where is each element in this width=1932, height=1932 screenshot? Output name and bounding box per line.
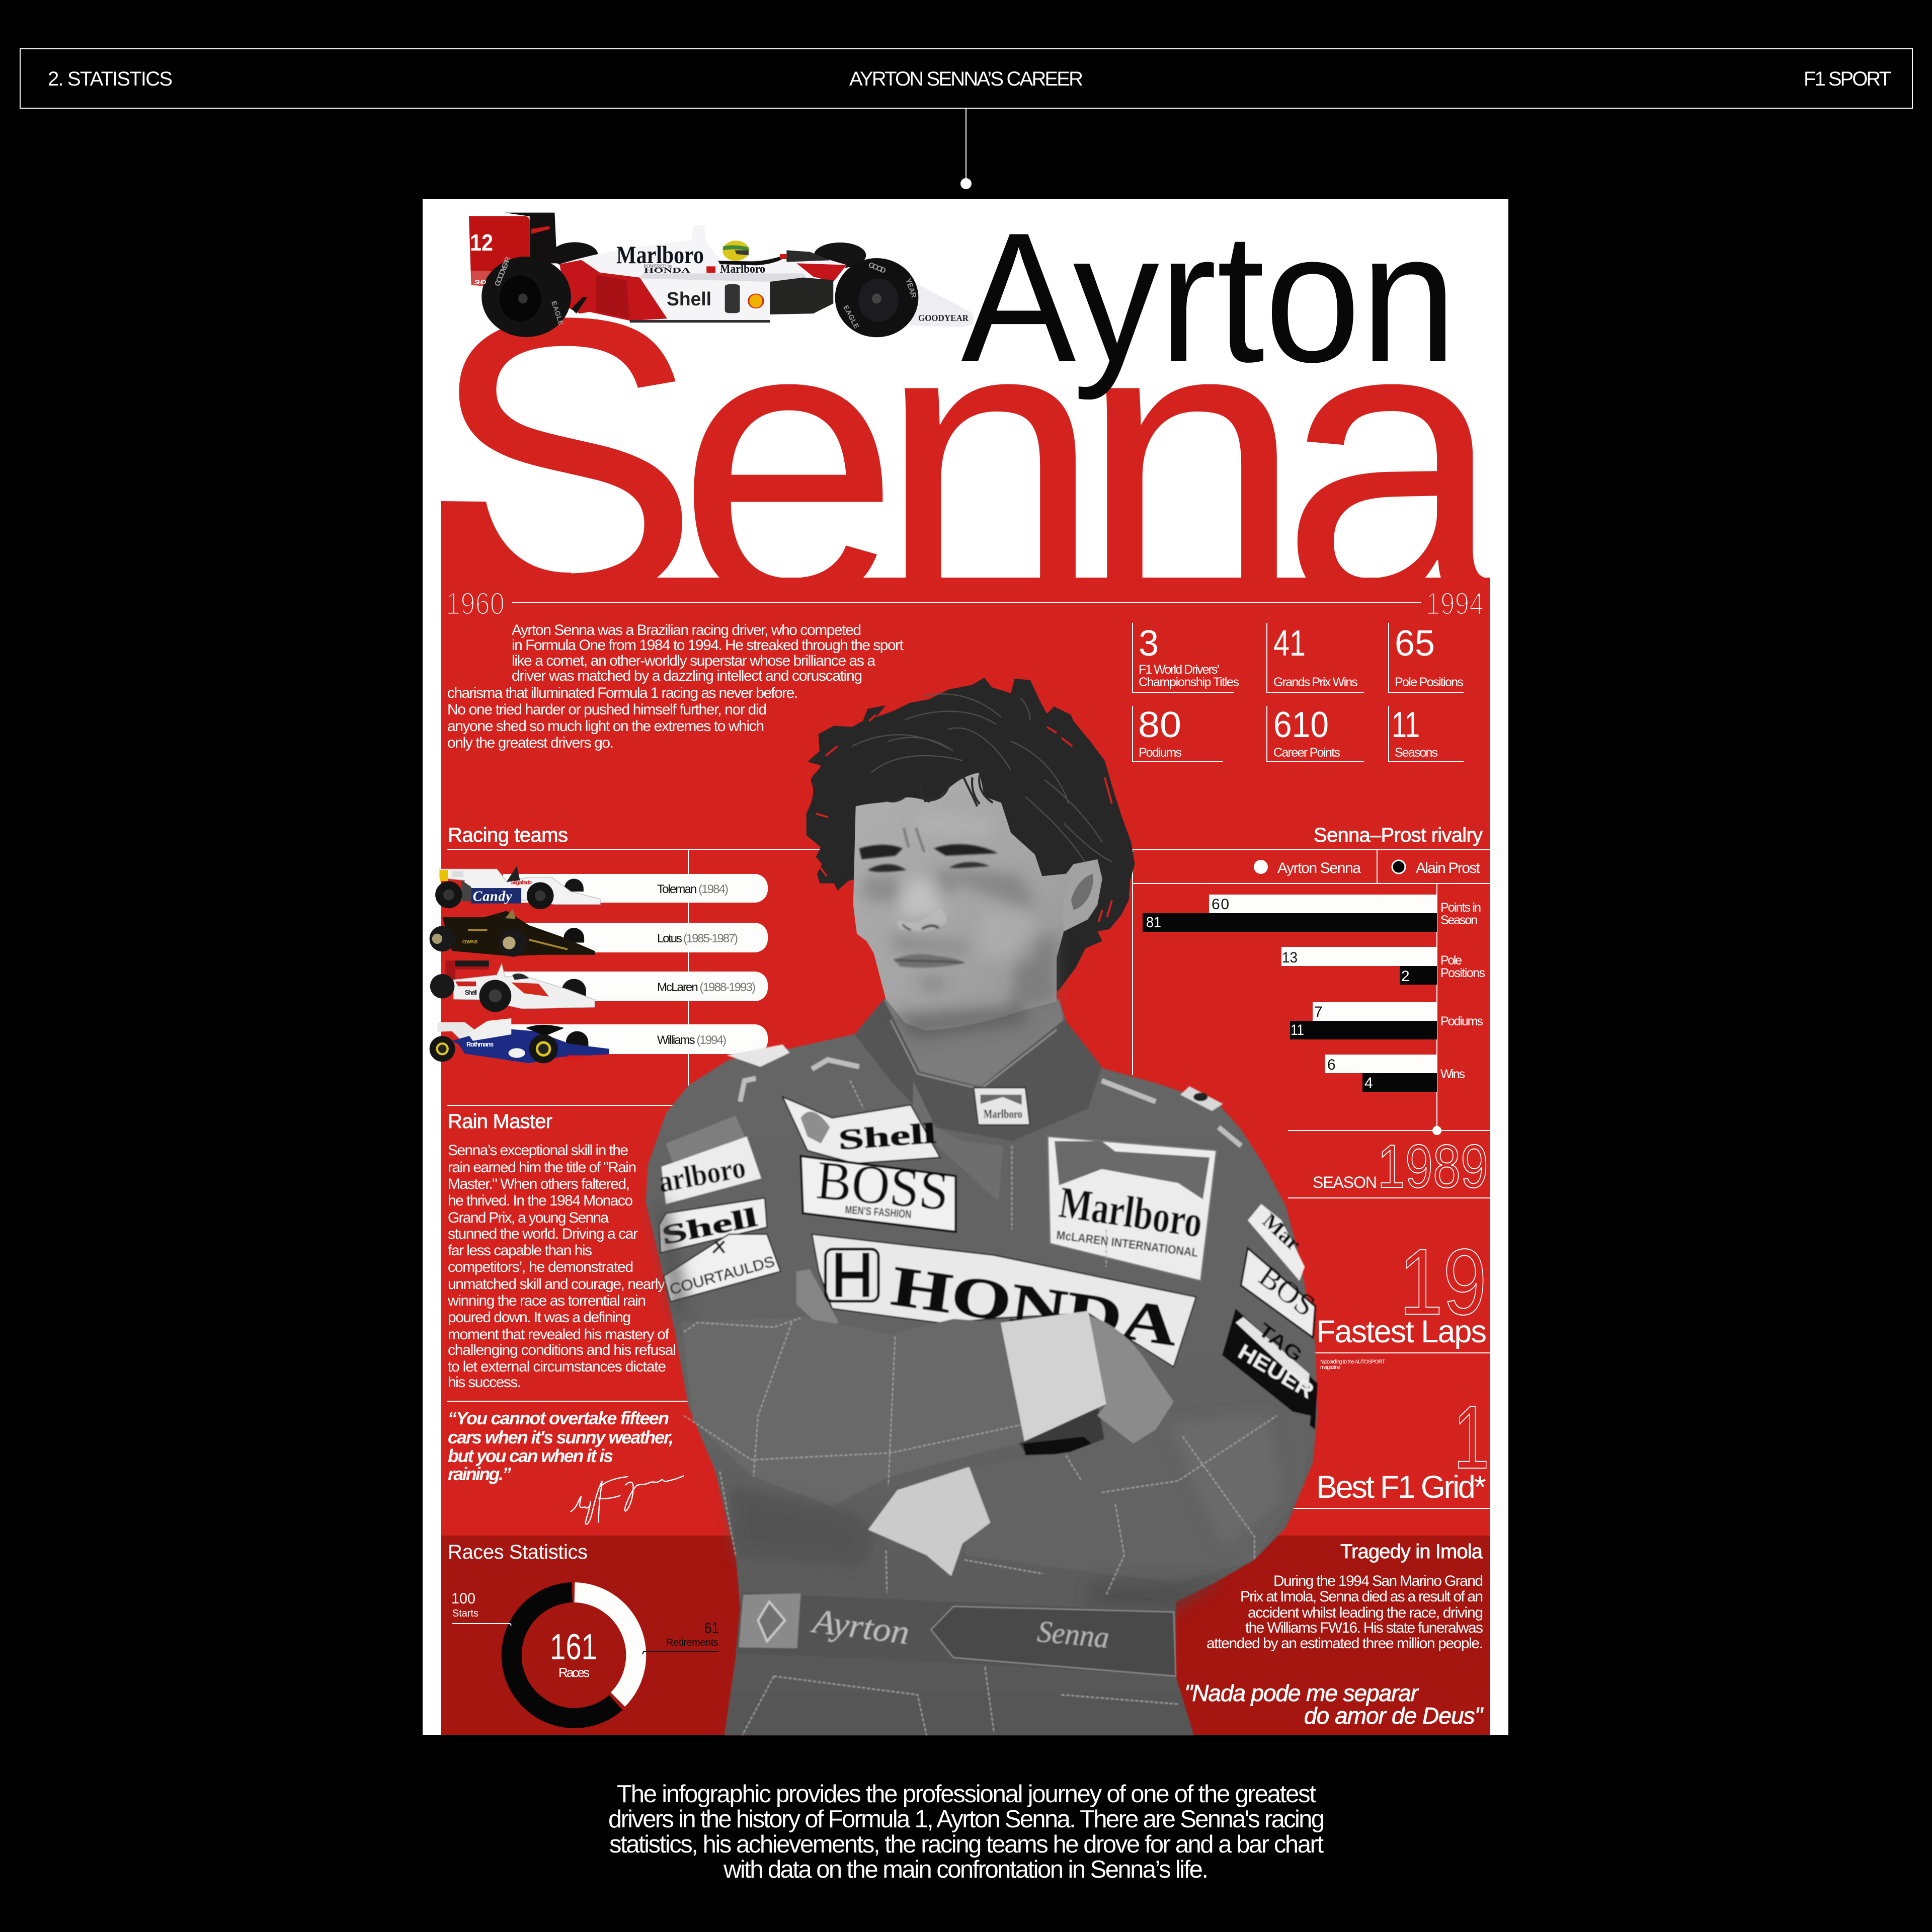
car sponsor text: GOOD xyxy=(867,261,887,275)
car sponsor text: EAGLE xyxy=(550,300,566,326)
portuguese quote: do amor de Deus" xyxy=(1304,1703,1484,1729)
chest patch: BOSS: MEN'S FASHION xyxy=(845,1203,912,1221)
bars: points: 60 xyxy=(1212,896,1229,913)
bars: wins: 6 xyxy=(1327,1057,1336,1073)
chest patch: Marlboro: Marlboro xyxy=(1057,1177,1205,1247)
rivalry heading: Senna–Prost rivalry xyxy=(1314,824,1483,846)
stat: titles: 3 xyxy=(1139,623,1159,664)
car sponsor text: GOODYEAR xyxy=(918,313,969,323)
car sponsor text: POWERED by xyxy=(644,264,672,269)
rain master body text: unmatched skill and courage, nearly xyxy=(448,1276,665,1293)
car: Williams: Rothmans xyxy=(466,1040,494,1048)
tragedy body: the Williams FW16. His state funeralwas xyxy=(1245,1620,1483,1636)
bar category labels: Season xyxy=(1440,913,1478,927)
bar category labels: Wins xyxy=(1440,1067,1465,1081)
footer description: drivers in the history of Formula 1, Ayrton Senna. There are Senna's racing xyxy=(608,1806,1325,1833)
pill: Williams: Williams (1994) xyxy=(657,1033,727,1047)
donut chart xyxy=(512,1592,636,1718)
legend: Ayrton Senna xyxy=(1277,860,1361,876)
stat: seasons xyxy=(1389,705,1464,762)
fastest laps: Fastest Laps xyxy=(1316,1314,1487,1349)
sleeve patch: right Marlboro xyxy=(1248,1204,1305,1281)
white cuff lower xyxy=(868,1467,990,1576)
sleeve patch: right Marlboro: Mar xyxy=(1258,1209,1305,1256)
rain master body text: competitors’, he demonstrated xyxy=(448,1259,633,1275)
retirements label xyxy=(642,1620,719,1654)
bars: podiums: 11 xyxy=(1291,1022,1304,1038)
fastest laps xyxy=(1313,1230,1490,1371)
intro text: only the greatest drivers go. xyxy=(447,735,614,751)
car: Williams xyxy=(430,1018,609,1063)
intro text: Ayrton Senna was a Brazilian racing driver, who competed xyxy=(512,622,861,638)
rain master body text: Master." When others faltered, xyxy=(448,1176,630,1192)
best grid: 1 xyxy=(1454,1387,1489,1487)
car sponsor text xyxy=(470,229,969,330)
car: Lotus xyxy=(430,909,595,957)
shoulder patches xyxy=(727,1044,789,1067)
rain master body text: far less capable than his xyxy=(448,1242,592,1259)
bar category labels: Points in xyxy=(1440,901,1481,915)
red main panel xyxy=(441,501,1490,1735)
donut centre: Races xyxy=(558,1665,590,1680)
bar category labels: Positions xyxy=(1440,966,1485,980)
footnote: magazine xyxy=(1320,1364,1340,1371)
footer description: statistics, his achievements, the racing teams he drove for and a bar chart xyxy=(609,1831,1324,1858)
chest patch: Honda: HONDA xyxy=(888,1254,1181,1357)
starts label xyxy=(451,1590,511,1626)
signature xyxy=(571,1476,684,1524)
neck xyxy=(884,999,1064,1086)
timeline: 1994 xyxy=(1426,587,1484,621)
footer description xyxy=(608,1781,1325,1883)
rain quote: cars when it's sunny weather, xyxy=(448,1427,674,1447)
intro text: charisma that illuminated Formula 1 racing as never before. xyxy=(447,685,798,701)
tragedy body xyxy=(1206,1573,1483,1652)
sleeve patch: Marlboro xyxy=(656,1115,761,1204)
rain master body text xyxy=(447,1142,676,1391)
chest patch: Shell: Shell xyxy=(837,1117,937,1156)
rain quote: raining.” xyxy=(448,1464,511,1484)
car: McLaren: Shell xyxy=(465,989,477,996)
upper forearm xyxy=(682,1317,1025,1506)
rain master body text: his success. xyxy=(448,1374,521,1391)
season 1989: SEASON xyxy=(1313,1173,1377,1191)
collar xyxy=(855,999,1102,1141)
lower hand fingers xyxy=(796,1269,839,1327)
career stats grid xyxy=(1133,623,1464,762)
nose xyxy=(897,909,947,931)
stat: points xyxy=(1267,705,1364,762)
bars: points xyxy=(1143,895,1437,932)
hair highlights xyxy=(852,694,1112,866)
stat: titles: F1 World Drivers’ xyxy=(1139,663,1220,677)
racing teams heading: Racing teams xyxy=(448,824,568,846)
pill: McLaren: McLaren (1988-1993) xyxy=(657,981,756,994)
sleeve patch: Shell xyxy=(659,1198,767,1253)
car sponsor text: Shell xyxy=(667,289,711,310)
tragedy body: During the 1994 San Marino Grand xyxy=(1273,1573,1483,1589)
intro text: anyone shed so much light on the extremes to which xyxy=(447,718,764,735)
pill: Lotus: Lotus (1985-1987) xyxy=(657,932,738,945)
shadow under arms xyxy=(1007,1402,1106,1453)
stat: poles: Pole Positions xyxy=(1395,675,1464,689)
intro text: No one tried harder or pushed himself further, nor did xyxy=(447,701,767,718)
pill: Lotus xyxy=(503,923,768,952)
bars: poles: 13 xyxy=(1282,949,1298,966)
stat: points: Career Points xyxy=(1273,746,1340,760)
team cars xyxy=(430,866,609,1063)
stat: titles: Championship Titles xyxy=(1139,675,1239,689)
chest patch: Marlboro xyxy=(1048,1137,1217,1281)
season 1989 xyxy=(1288,1132,1490,1200)
rain master block xyxy=(447,1110,689,1524)
eyebrows xyxy=(859,844,998,859)
hand xyxy=(1088,1316,1174,1443)
legend xyxy=(1254,860,1481,876)
hair xyxy=(807,678,1135,992)
suit soft shading xyxy=(653,1201,1281,1611)
sleeve patch: TAG Heuer: HEUER xyxy=(1234,1339,1318,1403)
stat: wins: 41 xyxy=(1273,623,1306,664)
stat: podiums: 80 xyxy=(1138,705,1181,745)
lower forearm xyxy=(962,1406,1311,1583)
tragedy body: Prix at Imola, Senna died as a result of an xyxy=(1240,1588,1483,1605)
intro text: in Formula One from 1984 to 1994. He streaked through the sport xyxy=(512,637,904,654)
chest patch: Honda xyxy=(812,1234,1196,1367)
white cuff upper xyxy=(1001,1311,1106,1441)
car sponsor text: 12 xyxy=(470,229,493,256)
portrait: suit: Ayrton xyxy=(809,1601,912,1652)
rivalry section xyxy=(1133,824,1490,1135)
starts label: Starts xyxy=(452,1608,478,1619)
bars: podiums: 7 xyxy=(1314,1004,1323,1020)
intro text: like a comet, an other-worldly superstar whose brilliance as a xyxy=(512,653,875,669)
fringe strands over forehead xyxy=(883,771,993,807)
collar patch: Marlboro xyxy=(974,1088,1030,1125)
bars: points: 81 xyxy=(1146,914,1161,931)
pill: Toleman: Toleman (1984) xyxy=(657,882,729,896)
stat: seasons: Seasons xyxy=(1395,746,1438,760)
retirements label: 61 xyxy=(704,1620,719,1637)
sleeve patch: TAG Heuer xyxy=(1222,1309,1318,1429)
suit stitching xyxy=(684,1081,1277,1735)
pill: Williams xyxy=(503,1024,768,1054)
races heading: Races Statistics xyxy=(448,1541,588,1563)
stat: poles xyxy=(1389,623,1464,692)
starts label: 100 xyxy=(451,1590,475,1607)
stat: wins: Grands Prix Wins xyxy=(1273,675,1358,689)
bars: poles xyxy=(1281,947,1437,985)
car: Toleman: Segafredo xyxy=(511,879,532,886)
rain quote xyxy=(448,1408,674,1484)
intro text: driver was matched by a dazzling intellect and coruscating xyxy=(512,668,862,684)
face shading xyxy=(862,814,1057,1040)
bars: poles: 2 xyxy=(1401,968,1410,985)
stat: poles: 65 xyxy=(1395,623,1435,664)
eyes xyxy=(868,828,989,872)
bar chart xyxy=(1143,883,1490,1135)
tragedy body: accident whilst leading the race, driving xyxy=(1248,1604,1483,1621)
car sponsor text: GOODYEAR xyxy=(493,255,513,287)
header bar xyxy=(20,49,1912,108)
retirements label: Retirements xyxy=(666,1637,718,1648)
belt xyxy=(736,1592,1176,1676)
rain master body text: Senna’s exceptional skill in the xyxy=(448,1142,628,1159)
bars: podiums xyxy=(1290,1002,1437,1039)
bar category labels: Pole xyxy=(1440,953,1462,968)
rain master body text: challenging conditions and his refusal xyxy=(448,1342,676,1358)
sleeve patch: Shell: Shell xyxy=(659,1202,760,1250)
rain master body text: he thrived. In the 1984 Monaco xyxy=(448,1192,633,1209)
sleeve patch: right BOSS xyxy=(1241,1248,1321,1337)
header left label: 2. STATISTICS xyxy=(48,68,173,90)
portuguese quote: "Nada pode me separar xyxy=(1184,1680,1419,1706)
rain master body text: rain earned him the title of "Rain xyxy=(448,1159,636,1176)
pill: McLaren xyxy=(503,972,768,1001)
car sponsor text: Marlboro xyxy=(720,263,765,276)
stat: wins xyxy=(1267,623,1364,692)
best grid xyxy=(1288,1387,1490,1508)
rain master body text: to let external circumstances dictate xyxy=(448,1358,666,1375)
car sponsor text: Marlboro xyxy=(616,240,704,269)
rain master body text: winning the race as torrential rain xyxy=(447,1293,646,1309)
collar patch: Marlboro: Marlboro xyxy=(984,1108,1022,1121)
portrait: suit: Senna xyxy=(1036,1615,1110,1654)
title: Ayrton: Ayrton xyxy=(961,194,1457,401)
bar category labels xyxy=(1440,901,1485,1081)
car: Lotus: OLYMPUS xyxy=(462,939,477,945)
rain quote: but you can when it is xyxy=(448,1445,613,1466)
season 1989: 1989 xyxy=(1378,1132,1488,1200)
car sponsor text: SHO xyxy=(474,279,487,286)
ear xyxy=(1063,862,1100,930)
bars: wins xyxy=(1325,1055,1437,1092)
donut centre: 161 xyxy=(550,1627,597,1667)
rain master body text: Grand Prix, a young Senna xyxy=(448,1210,609,1226)
bar category labels: Podiums xyxy=(1440,1014,1483,1028)
rain quote: “You cannot overtake fifteen xyxy=(448,1408,669,1428)
red gaps in hair xyxy=(816,715,1112,922)
races statistics xyxy=(448,1541,719,1718)
car: Toleman: Candy xyxy=(473,889,512,905)
timeline xyxy=(446,587,1484,621)
face xyxy=(853,773,1102,1030)
portuguese quote xyxy=(1184,1680,1484,1729)
fastest laps: 19 xyxy=(1399,1230,1487,1334)
timeline: 1960 xyxy=(446,587,505,621)
chest patch: BOSS: BOSS xyxy=(814,1150,951,1222)
car: Toleman xyxy=(435,866,600,909)
footnote: *according to the AUTOSPORT xyxy=(1320,1359,1385,1365)
stat: podiums xyxy=(1133,705,1223,762)
rain master body text: moment that revealed his mastery of xyxy=(448,1326,670,1343)
car sponsor text: YEAR xyxy=(904,277,918,299)
chest patch: Shell xyxy=(783,1097,940,1164)
sleeve patch: TAG Heuer: TAG xyxy=(1254,1319,1307,1366)
header right label: F1 SPORT xyxy=(1804,68,1891,90)
tragedy in imola xyxy=(1184,1541,1484,1729)
sleeve patch: Courtaulds xyxy=(664,1234,780,1302)
car sponsor text: HONDA xyxy=(644,267,690,275)
car: McLaren xyxy=(430,960,595,1012)
racing team pills xyxy=(503,874,768,1054)
stat: titles xyxy=(1133,623,1239,692)
mouth xyxy=(894,954,964,968)
sleeve patch: Marlboro: arlboro xyxy=(656,1150,748,1199)
stat: podiums: Podiums xyxy=(1139,746,1182,760)
footer description: with data on the main confrontation in Senna’s life. xyxy=(723,1856,1209,1883)
rain master heading: Rain Master xyxy=(448,1110,552,1133)
stat: points: 610 xyxy=(1273,705,1329,745)
sleeve patch: Courtaulds: COURTAULDS xyxy=(668,1253,776,1298)
rain master body text: poured down. It was a defining xyxy=(448,1309,631,1326)
car sponsor text: EAGLE xyxy=(842,304,861,330)
tragedy heading: Tragedy in Imola xyxy=(1340,1541,1483,1563)
portrait: suit xyxy=(646,999,1321,1735)
tragedy body: attended by an estimated three million people. xyxy=(1206,1635,1483,1652)
portrait: head xyxy=(807,678,1135,1040)
hero car: McLaren xyxy=(469,213,974,337)
footer description: The infographic provides the professional journey of one of the greatest xyxy=(617,1781,1316,1808)
chest patch: Marlboro: McLAREN INTERNATIONAL xyxy=(1056,1229,1199,1260)
dark red bottom band xyxy=(441,1536,1490,1735)
suit silhouette xyxy=(646,999,1317,1735)
bars: wins: 4 xyxy=(1364,1075,1373,1091)
donut centre xyxy=(550,1627,597,1680)
shoulder highlights xyxy=(740,1060,1241,1146)
connector line with dot xyxy=(960,108,972,189)
header centre label: AYRTON SENNA’S CAREER xyxy=(849,68,1083,90)
poster white panel xyxy=(423,199,1508,1735)
best grid: Best F1 Grid* xyxy=(1316,1470,1486,1505)
sleeve patch: right BOSS: BOS xyxy=(1253,1259,1321,1323)
stat: seasons: 11 xyxy=(1392,705,1420,745)
pill: Toleman xyxy=(503,874,768,903)
rain master body text: stunned the world. Driving a car xyxy=(448,1226,638,1242)
legend: Alain Prost xyxy=(1416,860,1481,876)
intro text xyxy=(447,622,904,751)
footnote xyxy=(1320,1359,1385,1371)
